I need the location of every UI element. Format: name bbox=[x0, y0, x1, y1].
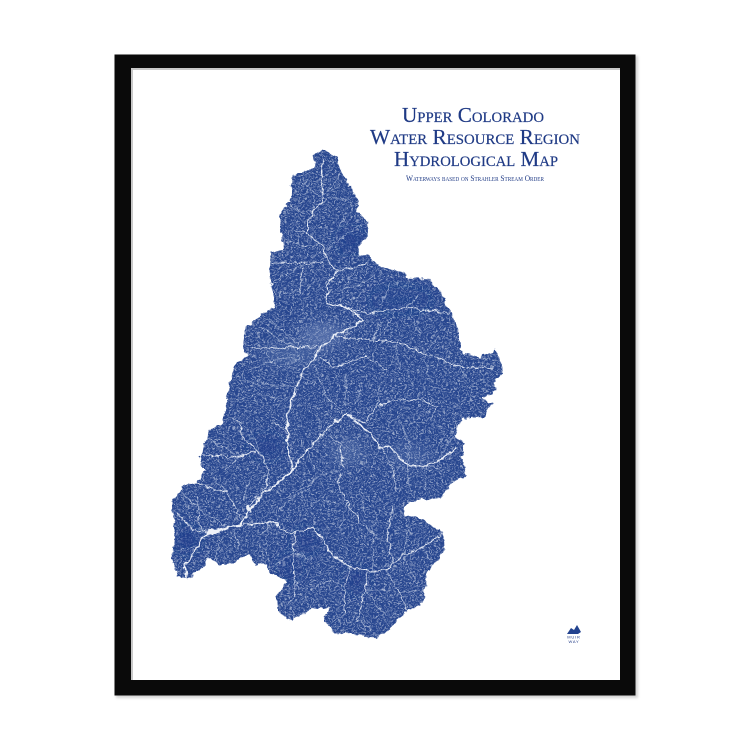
map: Upper Colorado river basin bbox=[165, 145, 510, 645]
title: Hydrological Map bbox=[394, 147, 558, 171]
lake bbox=[209, 530, 222, 532]
upper Colorado bbox=[293, 413, 457, 470]
tributary streams bbox=[180, 175, 490, 630]
title bbox=[370, 103, 580, 171]
dark and light terrain patches bbox=[175, 230, 432, 592]
White River bbox=[337, 337, 493, 368]
main rivers bbox=[177, 160, 493, 620]
subtitle: Waterways based on Strahler Stream Order bbox=[406, 173, 544, 183]
logo: Muir Way: MUIR bbox=[567, 634, 581, 640]
icon: mountain bbox=[567, 625, 581, 634]
title: Upper Colorado bbox=[402, 103, 544, 127]
river texture bbox=[165, 145, 510, 645]
picture frame bbox=[114, 54, 638, 698]
title: Water Resource Region bbox=[370, 125, 580, 149]
Colorado River bbox=[185, 470, 293, 578]
Green River bbox=[308, 160, 337, 303]
logo: Muir Way bbox=[567, 625, 581, 644]
reservoir bbox=[247, 505, 249, 510]
San Juan River bbox=[240, 522, 443, 572]
Gunnison branch bbox=[345, 400, 437, 423]
Yampa and upper Green stem bbox=[287, 303, 362, 470]
logo: Muir Way: WAY bbox=[568, 639, 580, 644]
